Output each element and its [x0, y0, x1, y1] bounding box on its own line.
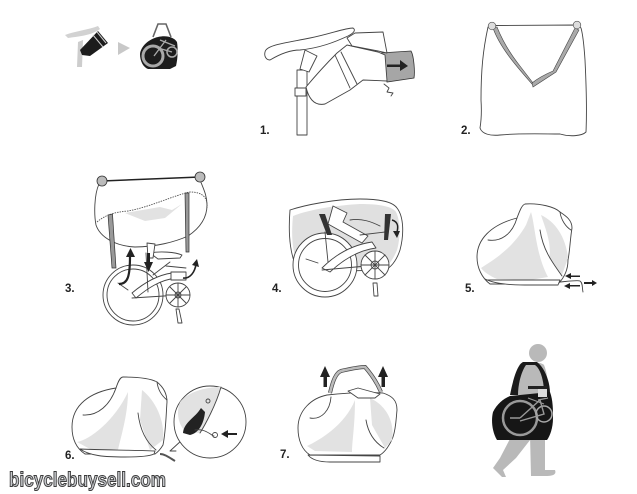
- cord: [384, 84, 393, 96]
- black bag: [492, 392, 553, 440]
- grey folds: [481, 212, 548, 280]
- step 7: lift by handles: [280, 366, 397, 462]
- step number: 4.: [272, 283, 282, 295]
- bag base: [80, 449, 155, 457]
- bag: [298, 393, 397, 455]
- cord stopper: [160, 454, 175, 461]
- step 1: pull the bag out of the pouch: [260, 28, 414, 137]
- arrow: [221, 430, 237, 438]
- arrow: [387, 60, 408, 71]
- arrow: [392, 220, 398, 232]
- overview: saddle pouch becomes carry bag: [65, 24, 178, 69]
- handle: [330, 367, 381, 393]
- step 3: lower bag over bicycle: [65, 172, 207, 325]
- bicycle: [503, 398, 552, 435]
- step 6: locking the cord: [65, 377, 246, 462]
- bag base: [485, 279, 560, 285]
- bag opening: [97, 192, 207, 222]
- bag: [72, 377, 167, 454]
- left knob: [488, 22, 496, 30]
- right strap: [532, 28, 579, 87]
- watermark: bicyclebuysell.com: [9, 470, 166, 492]
- grey folds: [77, 392, 128, 450]
- step 2: flat bag with straps: [461, 21, 586, 137]
- icon: saddle with pouch: [65, 26, 108, 67]
- left strap: [108, 214, 116, 268]
- bag base: [308, 455, 380, 462]
- pouch body: [306, 45, 387, 104]
- arrows: [119, 248, 199, 284]
- step number: 1.: [260, 125, 270, 137]
- bag straps: [510, 362, 550, 395]
- fold lines: [488, 212, 571, 276]
- step number: 2.: [461, 125, 471, 137]
- callout pointer: [170, 440, 182, 451]
- knobs: [97, 172, 205, 186]
- right knob: [573, 21, 581, 29]
- bag: [477, 204, 572, 284]
- cord and arrows: [560, 273, 597, 292]
- fold lines: [83, 382, 167, 450]
- right strap: [185, 193, 189, 252]
- left strap: [493, 27, 533, 84]
- bag back: [95, 180, 207, 247]
- step 4: bag around bicycle: [272, 199, 403, 297]
- person: [493, 344, 555, 477]
- bag: [289, 199, 403, 272]
- bag outline: [480, 25, 586, 136]
- seat post: [297, 70, 307, 135]
- carrying the bag on the shoulder: [492, 344, 555, 477]
- icon: grey arrow triangle: [118, 42, 130, 55]
- step 5: cinched bag with cord: [465, 204, 597, 295]
- grey packed bag: [380, 51, 414, 82]
- left strap: [319, 214, 332, 235]
- bicycle: [293, 206, 389, 297]
- clamp: [295, 88, 306, 96]
- step number: 3.: [65, 283, 75, 295]
- saddle: [265, 28, 354, 60]
- step number: 5.: [465, 283, 475, 295]
- bicycle: [103, 243, 190, 325]
- icon: bicycle in black bag: [140, 24, 178, 69]
- arm: [528, 386, 547, 398]
- callout circle: [174, 386, 246, 458]
- step number: 6.: [65, 450, 75, 462]
- right strap: [384, 214, 391, 240]
- closure: [348, 388, 380, 398]
- grey folds: [307, 400, 355, 452]
- top bar: [102, 177, 200, 181]
- step number: 7.: [280, 449, 290, 461]
- arrows: [320, 366, 388, 387]
- fold lines: [310, 397, 384, 448]
- pouch flap: [347, 32, 387, 53]
